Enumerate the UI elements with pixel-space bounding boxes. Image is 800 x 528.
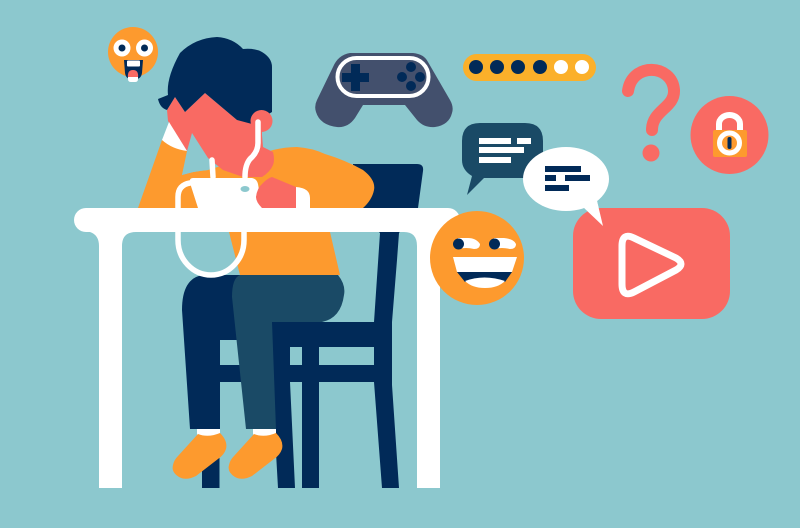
earphone wires bbox=[178, 122, 258, 275]
hand on tablet bbox=[256, 177, 296, 208]
person bbox=[138, 37, 374, 479]
ear bbox=[250, 110, 272, 132]
desk bbox=[74, 208, 460, 488]
gap between arm and head bbox=[182, 133, 208, 175]
shoes bbox=[173, 433, 226, 479]
front leg bbox=[232, 275, 344, 429]
speech bubble: white bbox=[523, 147, 609, 226]
hair bbox=[158, 37, 272, 124]
head and raised hand bbox=[167, 93, 274, 177]
chair bbox=[202, 164, 423, 488]
rating bar bbox=[463, 54, 596, 81]
icon: question mark bbox=[628, 70, 674, 162]
icon: padlock bbox=[690, 96, 768, 174]
bubble text lines bbox=[545, 166, 590, 191]
tablet bbox=[190, 178, 262, 208]
play icon bbox=[622, 236, 681, 294]
emoji: grinning face bbox=[430, 211, 524, 305]
bubble tail over player bbox=[583, 201, 603, 226]
icon: game controller bbox=[315, 53, 453, 127]
socks bbox=[197, 429, 276, 437]
video player bbox=[573, 201, 730, 319]
torso and arms bbox=[138, 140, 374, 275]
emoji: shocked face bbox=[108, 27, 158, 82]
watch cuff on raised wrist bbox=[162, 122, 187, 151]
tablet camera dot bbox=[240, 186, 250, 192]
sleeve cuff bbox=[296, 187, 310, 208]
back leg bbox=[182, 275, 245, 429]
speech bubble: dark bbox=[462, 123, 543, 195]
